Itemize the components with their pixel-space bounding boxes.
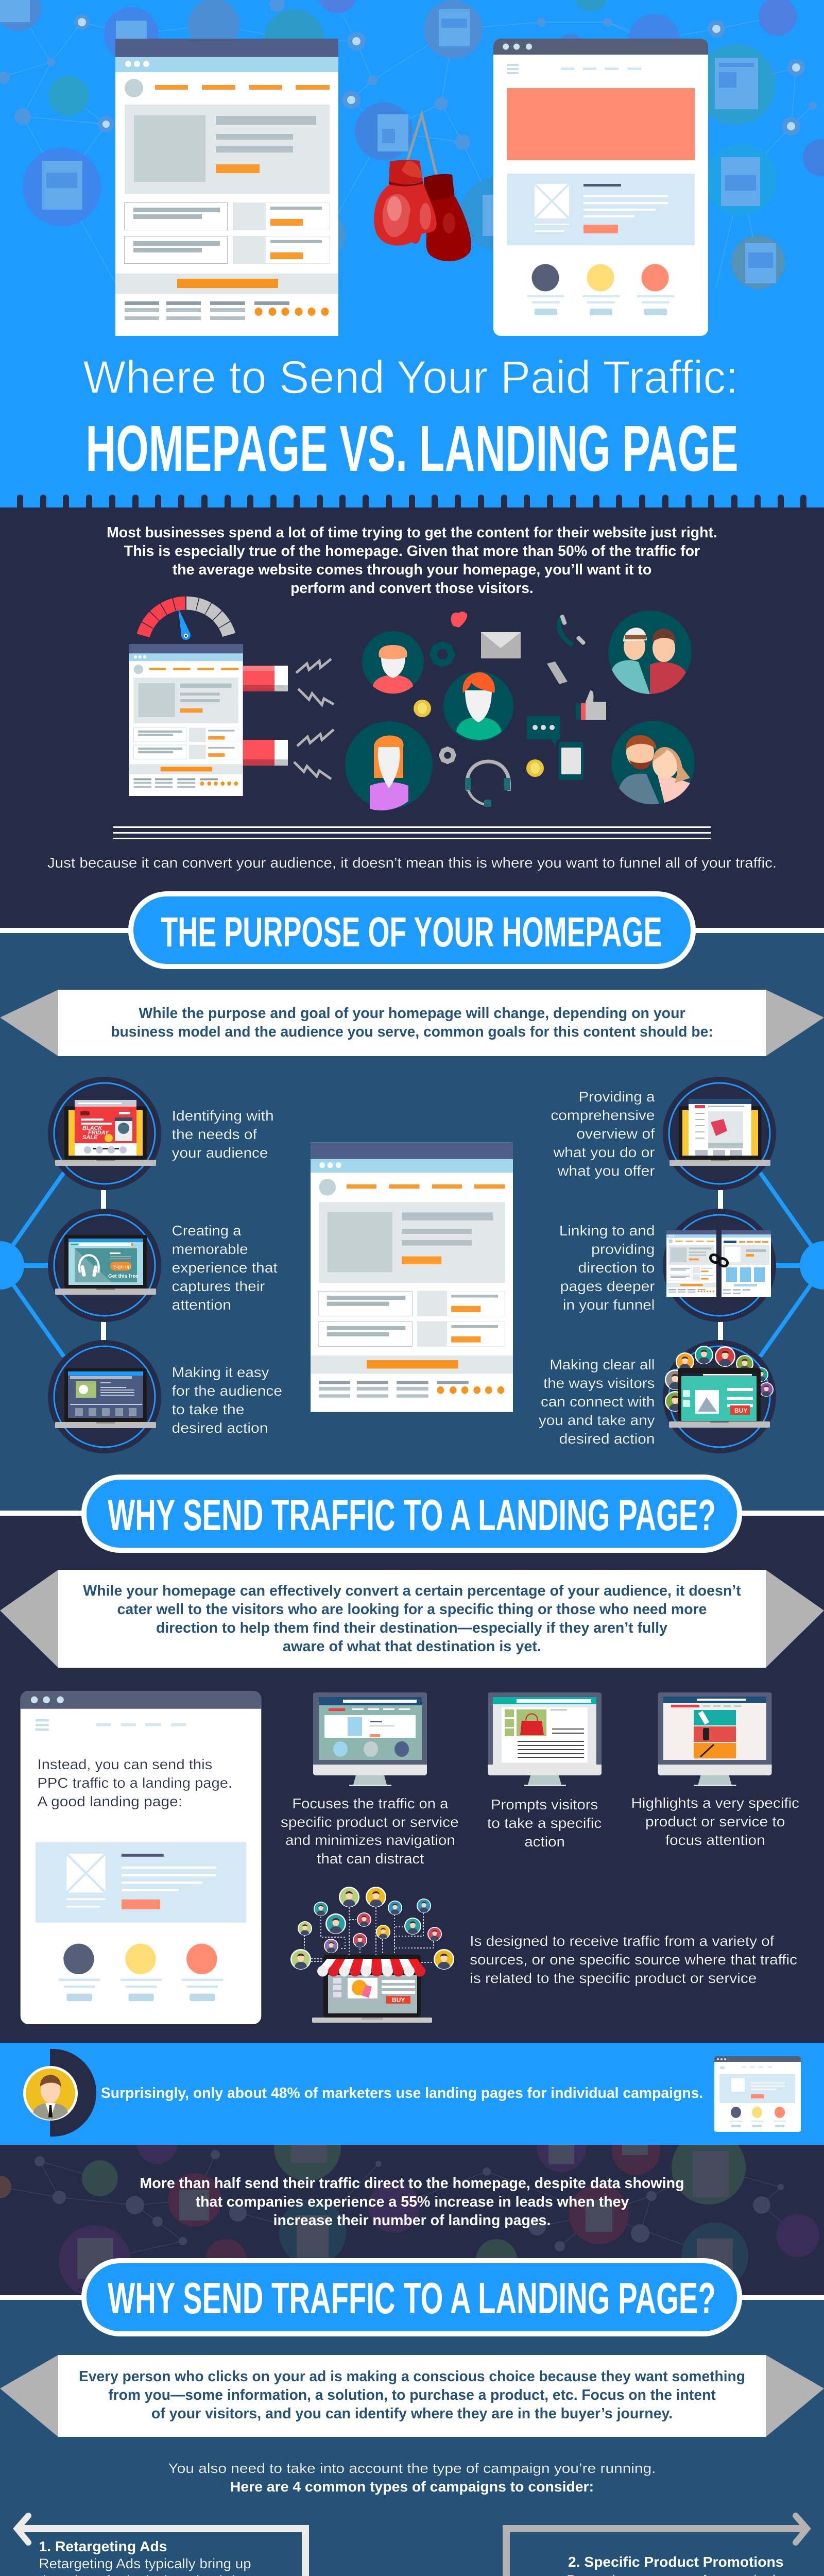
caption 3: Highlights a very specific bbox=[631, 1794, 799, 1811]
intro paragraph: Most businesses spend a lot of time trying to get the content for their website just right. bbox=[107, 524, 717, 541]
callout: visitors ribbon bbox=[0, 2355, 824, 2437]
banner: why send traffic 2 bbox=[84, 2261, 740, 2334]
icon: goal 5 linked pages bbox=[663, 1209, 776, 1322]
laptop sale text 2: FRIDAY bbox=[88, 1130, 110, 1136]
text: goal 2: memorable bbox=[172, 1241, 248, 1257]
ribbon text: business model and the audience you serve, common goals for this content should be: bbox=[111, 1023, 713, 1040]
caption 1: specific product or service bbox=[281, 1814, 459, 1830]
text: just because: Just because it can convert your audience, it doesn’t mean this is where you want to funnel all of your traffic. bbox=[47, 854, 777, 871]
text: goal 4: what you do or bbox=[553, 1144, 655, 1160]
text: goal 6 bbox=[539, 1356, 655, 1447]
caption 2 bbox=[487, 1796, 602, 1850]
text: monitor captions bbox=[281, 1794, 799, 1867]
ribbon text: from you—some information, a solution, to purchase a product, etc. Focus on the intent bbox=[108, 2386, 716, 2403]
text: goal 2 bbox=[172, 1222, 278, 1313]
ribbon text bbox=[83, 1582, 741, 1655]
ribbon text: cater well to the visitors who are looking for a specific thing or those who need more bbox=[117, 1601, 707, 1618]
laptop text: get this free: Get this free bbox=[108, 1274, 139, 1279]
caption 1: Focuses the traffic on a bbox=[292, 1795, 449, 1811]
text: more than half: increase their number of landing pages. bbox=[273, 2212, 551, 2229]
icon: monitor 1 bbox=[313, 1692, 427, 1786]
text: goal 1: the needs of bbox=[172, 1126, 257, 1142]
text: goal 5: pages deeper bbox=[560, 1278, 655, 1294]
text: goal 2: Creating a bbox=[172, 1222, 242, 1239]
icon: speedometer gauge bbox=[143, 603, 229, 640]
intro paragraph: the average website comes through your homepage, you’ll want it to bbox=[173, 561, 651, 578]
text: goal 1 bbox=[172, 1107, 274, 1161]
landing page hero block bbox=[507, 88, 695, 160]
decorative white lines bbox=[113, 826, 711, 839]
icon: monitor 3 bbox=[658, 1692, 771, 1786]
arrow: campaign 1 bbox=[17, 2516, 305, 2576]
text: campaign intro bbox=[168, 2460, 656, 2495]
card text: Instead, you can send this bbox=[37, 1756, 212, 1772]
icon: goal 2 laptop bbox=[48, 1209, 161, 1322]
text: goal 4: Providing a bbox=[578, 1088, 655, 1105]
icon: marketer avatar bbox=[23, 2049, 96, 2137]
icon: customer avatar group bbox=[345, 631, 513, 810]
icon: magnets bbox=[243, 666, 288, 766]
text: goal 5: in your funnel bbox=[563, 1296, 655, 1313]
text: goal 4: what you offer bbox=[557, 1162, 655, 1179]
text: campaign 2: 2. Specific Product Promotions bbox=[568, 2553, 783, 2570]
panel: statistic band bbox=[0, 2043, 824, 2145]
icon: mini landing page bbox=[714, 2056, 801, 2132]
button label: buy: BUY bbox=[392, 1996, 405, 2004]
icon: homepage browser mockup bbox=[115, 39, 338, 336]
text: goal 5 bbox=[559, 1222, 655, 1313]
text: goal 5: Linking to and bbox=[559, 1222, 655, 1239]
section background: why landing page bbox=[0, 1516, 824, 2043]
decorative teeth edge bbox=[17, 495, 806, 510]
intro paragraph: This is especially true of the homepage. Given that more than 50% of the traffic for bbox=[124, 543, 700, 560]
background network pattern: dark bbox=[0, 2145, 819, 2295]
intro paragraph bbox=[107, 524, 717, 597]
ribbon text: Every person who clicks on your ad is making a conscious choice because they want something bbox=[79, 2368, 745, 2385]
caption 1: and minimizes navigation bbox=[285, 1832, 455, 1848]
card text: PPC traffic to a landing page. bbox=[37, 1774, 232, 1791]
button label: buy: BUY bbox=[734, 1407, 747, 1414]
text: goal 6: you and take any bbox=[539, 1412, 655, 1428]
text: store description: sources, or one specific source where that traffic bbox=[470, 1951, 797, 1968]
connectors: left side bbox=[0, 1173, 106, 1357]
caption 3: product or service to bbox=[645, 1813, 785, 1829]
icon: monitor 2 bbox=[488, 1692, 602, 1786]
arrow: campaign 2 bbox=[506, 2516, 807, 2576]
caption 1 bbox=[281, 1795, 459, 1867]
text: goal 3: desired action bbox=[172, 1419, 268, 1436]
icon: landing page browser mockup bbox=[493, 39, 708, 336]
text: goal 3: Making it easy bbox=[172, 1364, 269, 1380]
title: line 1: Where to Send Your Paid Traffic: bbox=[83, 352, 739, 403]
banner: why send traffic bbox=[84, 1477, 740, 1550]
text: goal 2: captures their bbox=[172, 1278, 265, 1294]
caption 2: Prompts visitors bbox=[491, 1796, 598, 1812]
ribbon text: of your visitors, and you can identify where they are in the buyer’s journey. bbox=[151, 2405, 673, 2422]
section background: dark pattern bbox=[0, 2145, 824, 2295]
laptop sale text: BLACK bbox=[82, 1125, 103, 1131]
section background: hero bbox=[0, 0, 824, 507]
ribbon text: aware of what that destination is yet. bbox=[283, 1638, 541, 1655]
text: campaign intro: Here are 4 common types of campaigns to consider: bbox=[230, 2478, 594, 2495]
text: goal 6: Making clear all bbox=[550, 1356, 655, 1372]
laptop sale text 3: SALE bbox=[82, 1134, 98, 1141]
intro paragraph: perform and convert those visitors. bbox=[290, 580, 534, 597]
icon: happy customers top bbox=[608, 611, 692, 694]
text: more than half: that companies experience a 55% increase in leads when they bbox=[196, 2193, 629, 2210]
section background: purpose bbox=[0, 933, 824, 1511]
card text bbox=[37, 1756, 232, 1809]
ribbon text bbox=[111, 1005, 713, 1040]
icon: magnetic lightning bolts bbox=[294, 659, 334, 779]
icon: storefront with traffic sources bbox=[290, 1887, 454, 2023]
text: goal 2: attention bbox=[172, 1296, 231, 1313]
panel: landing page card bbox=[21, 1691, 261, 2024]
text: campaign intro: You also need to take into account the type of campaign you’re running. bbox=[168, 2460, 656, 2476]
text: goal 3: to take the bbox=[172, 1401, 244, 1417]
text: more than half: More than half send their traffic direct to the homepage, despite data showing bbox=[140, 2175, 684, 2192]
text: goal 4: comprehensive bbox=[551, 1107, 655, 1123]
section background: campaigns bbox=[0, 2300, 824, 2576]
text: campaign 1: Retargeting Ads typically bring up bbox=[39, 2555, 251, 2571]
caption 2: to take a specific bbox=[487, 1815, 602, 1831]
text: campaign 1 bbox=[39, 2538, 292, 2576]
caption 3: focus attention bbox=[665, 1832, 765, 1848]
text: goal 6: desired action bbox=[559, 1430, 655, 1447]
ribbon text: direction to help them find their destination—especially if they aren’t fully bbox=[156, 1619, 668, 1636]
icon: small homepage mockup bbox=[129, 644, 243, 796]
ribbon text bbox=[79, 2368, 745, 2422]
text: goal 3 bbox=[172, 1364, 282, 1436]
text: goal 5: providing bbox=[591, 1241, 655, 1257]
text: goal 2: experience that bbox=[172, 1259, 278, 1276]
background network pattern bbox=[0, 0, 824, 289]
text: campaign 1: 1. Retargeting Ads bbox=[39, 2538, 167, 2554]
card text: A good landing page: bbox=[37, 1793, 182, 1809]
text: goal 1: your audience bbox=[172, 1144, 268, 1161]
ribbon text: While your homepage can effectively convert a certain percentage of your audience, it doesn’t bbox=[83, 1582, 741, 1599]
text: more than half bbox=[140, 2175, 684, 2229]
section background: dark intro bbox=[0, 507, 824, 933]
icon: central homepage mockup bbox=[311, 1142, 513, 1412]
caption 1: that can distract bbox=[317, 1850, 424, 1867]
callout: landing page ribbon bbox=[0, 1570, 824, 1668]
callout: goals intro ribbon bbox=[0, 990, 824, 1056]
icon: goal 1 laptop bbox=[48, 1077, 161, 1190]
icon: happy customers bottom bbox=[611, 721, 695, 804]
text: campaign 2 bbox=[556, 2553, 784, 2576]
banner: the purpose of your homepage bbox=[131, 894, 693, 967]
caption 2: action bbox=[524, 1833, 565, 1850]
statistic text: Surprisingly, only about 48% of marketers use landing pages for individual campaigns. bbox=[101, 2084, 703, 2102]
connectors: right side bbox=[718, 1173, 824, 1357]
laptop text: sign up: Sign up bbox=[113, 1264, 131, 1270]
icon: goal 4 laptop bbox=[663, 1077, 776, 1190]
text: goal 6: the ways visitors bbox=[543, 1375, 655, 1391]
text: store description: is related to the specific product or service bbox=[470, 1970, 757, 1986]
ribbon text: While the purpose and goal of your homepage will change, depending on your bbox=[139, 1005, 685, 1022]
icon: goal 3 laptop bbox=[48, 1340, 161, 1453]
text: goal 6: can connect with bbox=[541, 1393, 655, 1410]
icon: marketing symbols bbox=[414, 612, 606, 807]
icon: boxing gloves bbox=[374, 114, 471, 261]
icon: goal 6 laptop with audience bbox=[663, 1340, 776, 1453]
text: store description bbox=[470, 1933, 797, 1986]
text: goal 5: direction to bbox=[578, 1259, 655, 1276]
text: store description: Is designed to receive traffic from a variety of bbox=[470, 1933, 774, 1949]
text: goal 1: Identifying with bbox=[172, 1107, 274, 1124]
caption 3 bbox=[631, 1794, 799, 1848]
text: goal 4 bbox=[551, 1088, 655, 1179]
text: goal 3: for the audience bbox=[172, 1382, 282, 1399]
text: goal 4: overview of bbox=[576, 1125, 655, 1142]
